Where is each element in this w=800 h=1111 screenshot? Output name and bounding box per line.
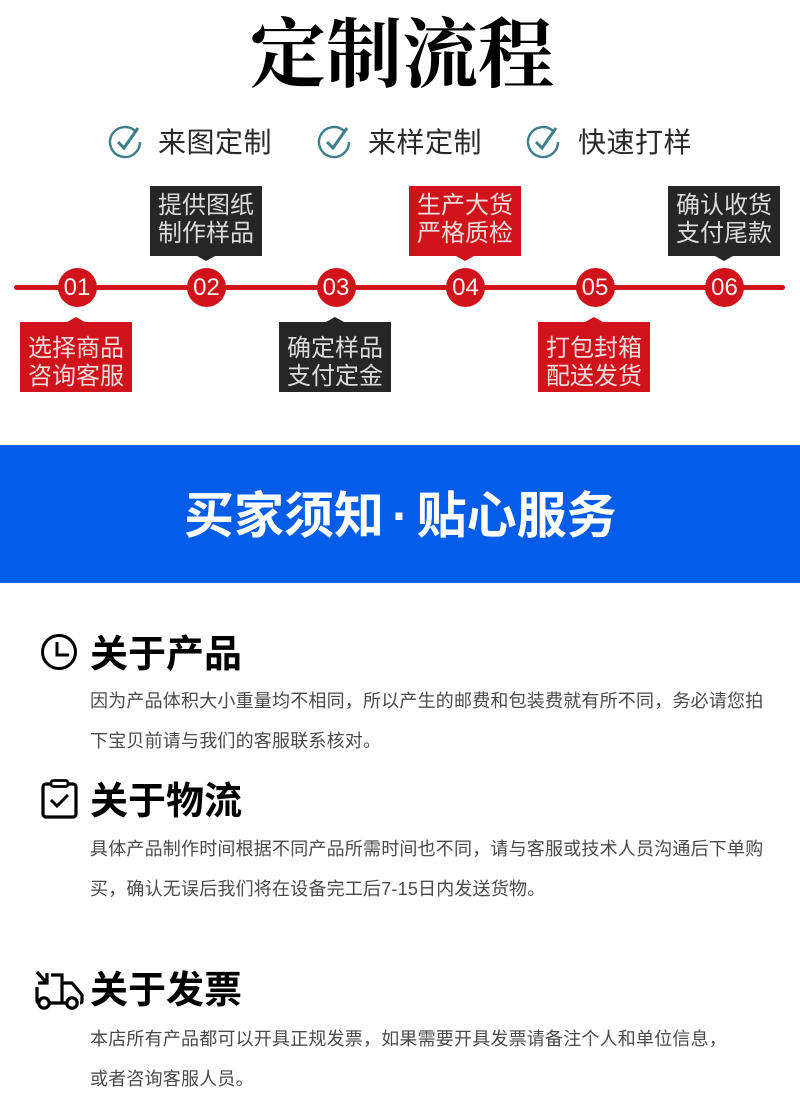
heading: 关于发票: 关于发票 <box>90 970 242 1012</box>
icon: check 3 <box>526 126 560 158</box>
step 05 label: 配送发货 <box>546 363 642 390</box>
title: 定制流程 <box>250 14 554 98</box>
banner <box>0 445 800 583</box>
step 03 label <box>279 322 391 392</box>
process timeline line <box>14 285 785 290</box>
invoice text line 1: 本店所有产品都可以开具正规发票，如果需要开具发票请备注个人和单位信息， <box>90 1029 727 1049</box>
step 05 label: 打包封箱 <box>546 335 642 362</box>
step 01 label: 选择商品 <box>28 335 124 362</box>
step number 02 <box>187 268 226 307</box>
step 05 label <box>538 322 650 392</box>
step number 03 <box>316 268 356 307</box>
step number 01 <box>58 268 96 307</box>
option: 快速打样: 快速打样 <box>578 127 692 158</box>
logistics text line 2: 买，确认无误后我们将在设备完工后7-15日内发送货物。 <box>90 879 545 899</box>
banner heading: 买家须知·贴心服务 <box>184 488 617 544</box>
icon: clipboard check <box>41 779 78 819</box>
step 01 label <box>20 322 132 392</box>
step 03 label: 确定样品 <box>287 335 383 362</box>
icon: check 2 <box>318 126 350 158</box>
step 04 label: 严格质检 <box>417 220 513 247</box>
step number 04 <box>446 268 485 307</box>
heading: 关于产品: 关于产品 <box>90 634 242 676</box>
step 06 label: 支付尾款 <box>676 220 772 247</box>
step number 02: 02 <box>193 274 220 301</box>
heading: 关于物流: 关于物流 <box>90 781 242 823</box>
step 03 label: 支付定金 <box>287 363 383 390</box>
step number 05 <box>576 268 614 307</box>
option: 来样定制: 来样定制 <box>368 127 482 158</box>
step 02 label <box>150 186 262 256</box>
product text line 2: 下宝贝前请与我们的客服联系核对。 <box>90 731 381 751</box>
step number 01: 01 <box>64 274 90 301</box>
step number 06 <box>705 268 744 307</box>
step 02 label: 制作样品 <box>158 220 254 247</box>
step number 06: 06 <box>711 274 738 301</box>
logistics text line 1: 具体产品制作时间根据不同产品所需时间也不同，请与客服或技术人员沟通后下单购 <box>90 839 763 859</box>
option: 来图定制: 来图定制 <box>158 127 272 158</box>
step 04 label <box>409 186 521 256</box>
product text line 1: 因为产品体积大小重量均不相同，所以产生的邮费和包装费就有所不同，务必请您拍 <box>90 691 763 711</box>
step 06 label <box>668 186 780 256</box>
invoice text line 2: 或者咨询客服人员。 <box>90 1069 254 1089</box>
icon: check 1 <box>108 126 142 158</box>
step 02 label: 提供图纸 <box>158 192 254 219</box>
step 06 label: 确认收货 <box>676 192 772 219</box>
step 04 label: 生产大货 <box>417 192 513 219</box>
icon: clock <box>41 634 77 670</box>
step number 03: 03 <box>323 274 349 301</box>
icon: delivery truck <box>35 970 84 1010</box>
step number 05: 05 <box>582 274 608 301</box>
step number 04: 04 <box>452 274 479 301</box>
service options row <box>108 126 692 158</box>
step 01 label: 咨询客服 <box>28 363 124 390</box>
